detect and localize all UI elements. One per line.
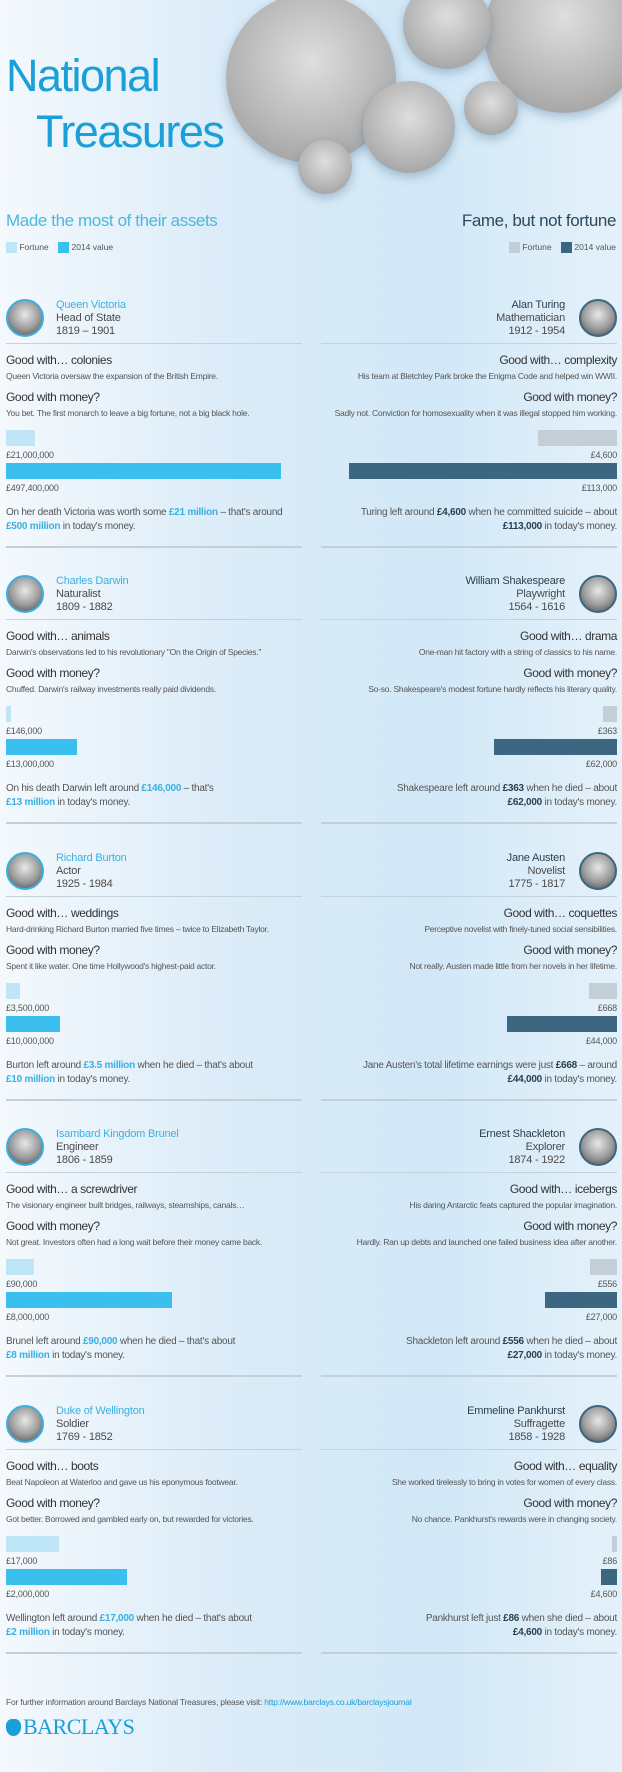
panel: Queen Victoria: On her death Victoria was worth some £21 million – that's around [6, 507, 282, 518]
panel: Ernest Shackleton: £27,000 [586, 1312, 617, 1322]
panel: Alan Turing: £113,000 in today's money. [503, 521, 617, 532]
logo: Barclays: BARCLAYS [23, 1714, 134, 1739]
panel: William Shakespeare: One-man hit factory with a string of classics to his name. [419, 647, 617, 657]
panel: Emmeline Pankhurst: 1858 - 1928 [508, 1431, 565, 1443]
panel: William Shakespeare: So-so. Shakespeare's modest fortune hardly reflects his literary quality. [368, 684, 617, 694]
panel: Jane Austen: Perceptive novelist with finely-tuned social sensibilities. [424, 924, 617, 934]
panel: Charles Darwin: Darwin's observations led to his revolutionary "On the Origin of Species." [6, 647, 261, 657]
panel: William Shakespeare: £62,000 in today's money. [508, 797, 617, 808]
panel: Isambard Kingdom Brunel: Not great. Investors often had a long wait before their money came back. [6, 1237, 262, 1247]
panel: Ernest Shackleton: £27,000 in today's money. [508, 1350, 617, 1361]
panel: Ernest Shackleton: Explorer [526, 1141, 565, 1153]
panel: Alan Turing: Turing left around £4,600 when he committed suicide – about [361, 507, 617, 518]
panel: Jane Austen: £44,000 [586, 1036, 617, 1046]
panel: Richard Burton: Hard-drinking Richard Burton married five times – twice to Elizabeth Taylor. [6, 924, 269, 934]
panel: Charles Darwin: £146,000 [6, 726, 42, 736]
panel: Alan Turing: 1912 - 1954 [508, 325, 565, 337]
panel: Alan Turing: Sadly not. Conviction for homosexuality when it was illegal stopped him working. [335, 408, 617, 418]
panel: Charles Darwin: £13 million in today's money. [6, 797, 130, 808]
panel: Jane Austen: £668 [598, 1003, 617, 1013]
panel: Duke of Wellington: Good with… boots [6, 1459, 98, 1473]
panel: Isambard Kingdom Brunel: £90,000 [6, 1279, 37, 1289]
panel: Charles Darwin: Naturalist [56, 588, 100, 600]
panel: Duke of Wellington: Beat Napoleon at Waterloo and gave us his eponymous footwear. [6, 1477, 238, 1487]
photo: Brunel [363, 81, 455, 173]
panel: Richard Burton: Burton left around £3.5 million when he died – that's about [6, 1060, 253, 1071]
panel: Richard Burton: £10 million in today's money. [6, 1074, 130, 1085]
panel: Richard Burton [6, 852, 302, 1101]
panel: Queen Victoria: Good with money? [6, 390, 100, 404]
panel: Isambard Kingdom Brunel: Good with money? [6, 1219, 100, 1233]
panel: Charles Darwin: £13,000,000 [6, 759, 54, 769]
panel: Queen Victoria: Good with… colonies [6, 353, 112, 367]
panel: Emmeline Pankhurst [321, 1405, 618, 1654]
panel: Duke of Wellington [6, 1405, 302, 1654]
panel: Alan Turing: Good with money? [523, 390, 617, 404]
panel: Queen Victoria: £500 million in today's money. [6, 521, 135, 532]
panel: Alan Turing: Mathematician [496, 312, 565, 324]
panel: Isambard Kingdom Brunel: £8,000,000 [6, 1312, 49, 1322]
panel: Queen Victoria: You bet. The first monarch to leave a big fortune, not a big black hole. [6, 408, 249, 418]
panel: Emmeline Pankhurst: Emmeline Pankhurst [467, 1405, 565, 1417]
panel: Emmeline Pankhurst: No chance. Pankhurst's rewards were in changing society. [412, 1514, 617, 1524]
photo: Austen [403, 0, 491, 69]
panel: Alan Turing: Alan Turing [512, 299, 565, 311]
panel: Ernest Shackleton: His daring Antarctic feats captured the popular imagination. [409, 1200, 617, 1210]
panel: Isambard Kingdom Brunel: Good with… a screwdriver [6, 1182, 137, 1196]
right heading: Fame, but not fortune [462, 211, 616, 230]
left legend: Fortune 2014 value [19, 242, 113, 252]
panel: Isambard Kingdom Brunel: £8 million in today's money. [6, 1350, 125, 1361]
panel: Jane Austen: Jane Austen [507, 852, 565, 864]
left heading: Made the most of their assets [6, 211, 217, 230]
panel: Alan Turing [321, 299, 618, 548]
panel: Emmeline Pankhurst: Pankhurst left just £86 when she died – about [426, 1613, 617, 1624]
panel: Charles Darwin: Good with money? [6, 666, 100, 680]
panel: Ernest Shackleton: Shackleton left around £556 when he died – about [406, 1336, 617, 1347]
panel: Richard Burton: £3,500,000 [6, 1003, 49, 1013]
panel: William Shakespeare: Playwright [516, 588, 565, 600]
panel: Queen Victoria: 1819 – 1901 [56, 325, 115, 337]
right legend: Fortune 2014 value [522, 242, 616, 252]
panel: Jane Austen: Novelist [527, 865, 565, 877]
panel: Alan Turing: Good with… complexity [499, 353, 617, 367]
panel: Ernest Shackleton [321, 1128, 618, 1377]
panel: Charles Darwin: 1809 - 1882 [56, 601, 113, 613]
panel: Duke of Wellington: Got better. Borrowed and gambled early on, but rewarded for victories. [6, 1514, 254, 1524]
panel: Ernest Shackleton: Hardly. Ran up debts and launched one failed business idea after another. [357, 1237, 617, 1247]
panel: Richard Burton: Good with money? [6, 943, 100, 957]
photo: Pankhurst [464, 81, 518, 135]
panel: Isambard Kingdom Brunel: 1806 - 1859 [56, 1154, 113, 1166]
panel: Emmeline Pankhurst: £4,600 in today's money. [513, 1627, 617, 1638]
panel: Duke of Wellington: £2,000,000 [6, 1589, 49, 1599]
panel: Charles Darwin [6, 575, 302, 824]
panel: Ernest Shackleton: £556 [598, 1279, 617, 1289]
footer text: For further information around Barclays National Treasures, please visit: http://www.barclays.co.uk/barclaysjournal [6, 1697, 412, 1707]
panel: Jane Austen: Good with money? [523, 943, 617, 957]
panel: Queen Victoria [6, 299, 302, 548]
panel: Queen Victoria: Queen Victoria [56, 299, 126, 311]
panel: Ernest Shackleton: Good with money? [523, 1219, 617, 1233]
panel: Duke of Wellington: Wellington left around £17,000 when he died – that's about [6, 1613, 252, 1624]
panel: Charles Darwin: Chuffed. Darwin's railway investments really paid dividends. [6, 684, 216, 694]
panel: Alan Turing: £4,600 [591, 450, 617, 460]
panel: William Shakespeare: William Shakespeare [465, 575, 565, 587]
panel: Emmeline Pankhurst: She worked tirelessly to bring in votes for women of every class. [392, 1477, 617, 1487]
title [6, 50, 224, 157]
panel: Jane Austen: £44,000 in today's money. [508, 1074, 617, 1085]
panel: Duke of Wellington: Good with money? [6, 1496, 100, 1510]
panel: Richard Burton: Good with… weddings [6, 906, 118, 920]
panel: Emmeline Pankhurst: Good with… equality [514, 1459, 617, 1473]
panel: Isambard Kingdom Brunel: Brunel left around £90,000 when he died – that's about [6, 1336, 235, 1347]
panel: Jane Austen: Good with… coquettes [504, 906, 617, 920]
panel: Richard Burton: 1925 - 1984 [56, 878, 113, 890]
panel: William Shakespeare [321, 575, 618, 824]
panel: William Shakespeare: Good with money? [523, 666, 617, 680]
panel: Alan Turing: His team at Bletchley Park broke the Enigma Code and helped win WWII. [358, 371, 617, 381]
title: Treasures [36, 106, 223, 157]
photo collage [220, 0, 622, 203]
panel: Charles Darwin: On his death Darwin left around £146,000 – that's [6, 783, 214, 794]
panel: Isambard Kingdom Brunel: Engineer [56, 1141, 98, 1153]
panel: Richard Burton: Spent it like water. One time Hollywood's highest-paid actor. [6, 961, 216, 971]
panel: Ernest Shackleton: 1874 - 1922 [508, 1154, 565, 1166]
panel: Duke of Wellington: Soldier [56, 1418, 89, 1430]
panel: Duke of Wellington: Duke of Wellington [56, 1405, 145, 1417]
panel: Ernest Shackleton: Good with… icebergs [510, 1182, 617, 1196]
panel: Ernest Shackleton: Ernest Shackleton [479, 1128, 565, 1140]
panel: Emmeline Pankhurst: £86 [603, 1556, 617, 1566]
panel: Duke of Wellington: 1769 - 1852 [56, 1431, 113, 1443]
panel: Jane Austen [321, 852, 617, 1101]
panel: Alan Turing: £113,000 [582, 483, 617, 493]
panel: Isambard Kingdom Brunel: Isambard Kingdom Brunel [56, 1128, 179, 1140]
panel: Emmeline Pankhurst: Good with money? [523, 1496, 617, 1510]
panel: Charles Darwin: Good with… animals [6, 629, 110, 643]
panel: Jane Austen: Jane Austen's total lifetime earnings were just £668 – around [363, 1060, 617, 1071]
panel: Duke of Wellington: £2 million in today's money. [6, 1627, 125, 1638]
panel: Queen Victoria: £21,000,000 [6, 450, 54, 460]
panel: Emmeline Pankhurst: £4,600 [591, 1589, 617, 1599]
panel: Isambard Kingdom Brunel [6, 1128, 302, 1377]
photo: Shakespeare [484, 0, 622, 113]
panel: William Shakespeare: Shakespeare left around £363 when he died – about [397, 783, 617, 794]
panel: Queen Victoria: £497,400,000 [6, 483, 59, 493]
photo: Darwin [298, 140, 352, 194]
panel: Queen Victoria: Queen Victoria oversaw the expansion of the British Empire. [6, 371, 218, 381]
panel: Emmeline Pankhurst: Suffragette [514, 1418, 565, 1430]
panel: Charles Darwin: Charles Darwin [56, 575, 128, 587]
photo: Victoria [226, 0, 396, 163]
panel: Jane Austen: Not really. Austen made little from her novels in her lifetime. [409, 961, 617, 971]
panel: William Shakespeare: £363 [598, 726, 617, 736]
panel: Queen Victoria: Head of State [56, 312, 121, 324]
panel: William Shakespeare: 1564 - 1616 [508, 601, 565, 613]
panel: Richard Burton: Actor [56, 865, 81, 877]
panel: Isambard Kingdom Brunel: The visionary engineer built bridges, railways, steamships, canals… [6, 1200, 244, 1210]
title: National [6, 50, 159, 101]
panel: William Shakespeare: £62,000 [586, 759, 617, 769]
panel: William Shakespeare: Good with… drama [520, 629, 617, 643]
panel: Richard Burton: Richard Burton [56, 852, 127, 864]
panel: Duke of Wellington: £17,000 [6, 1556, 37, 1566]
panel: Richard Burton: £10,000,000 [6, 1036, 54, 1046]
panel: Jane Austen: 1775 - 1817 [508, 878, 565, 890]
